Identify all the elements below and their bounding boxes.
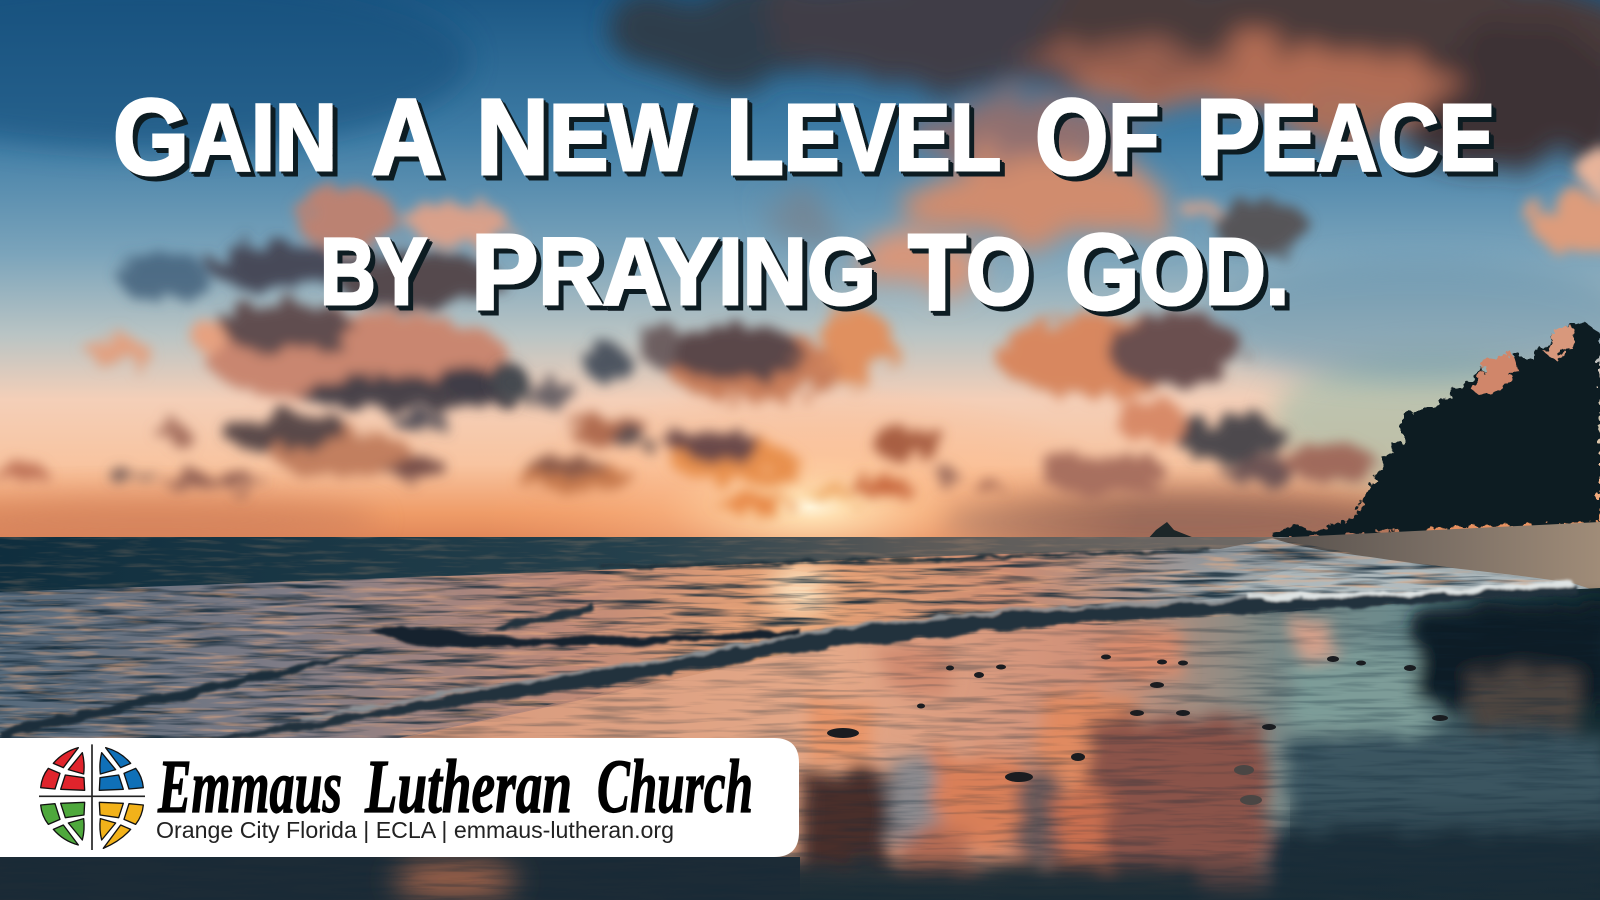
title line 2: OD. — [1139, 219, 1289, 325]
sand — [1272, 522, 1600, 592]
title line 1: EACE — [1260, 85, 1495, 191]
title line 1: L — [726, 76, 792, 197]
clouds left — [0, 146, 1600, 489]
title line 1: F — [1108, 85, 1159, 191]
title line 2: G — [1065, 211, 1149, 332]
church name: Church — [597, 745, 753, 829]
pebbles on wet sand — [827, 654, 1448, 805]
yellow quadrant — [99, 802, 143, 848]
green quadrant — [41, 802, 85, 845]
church name: Emmaus — [157, 745, 342, 829]
title line 2: RAYING — [538, 219, 876, 325]
title line 1: EW — [549, 85, 692, 191]
title line 2: O — [966, 219, 1031, 325]
title line 2 — [320, 211, 1289, 332]
title line 1: N — [476, 76, 554, 197]
tree-lined headland — [1146, 323, 1600, 541]
church details line: Orange City Florida | ECLA | emmaus-lutheran.org — [156, 817, 674, 843]
church name — [157, 745, 753, 829]
blue quadrant — [99, 748, 143, 790]
sea — [0, 522, 1600, 900]
title line 2: T — [908, 211, 974, 332]
waves and foam — [0, 550, 1578, 745]
icon: church globe cross logo — [39, 744, 145, 850]
foam spray — [1170, 566, 1572, 606]
clouds centre — [494, 307, 1378, 512]
church name: Lutheran — [364, 745, 572, 829]
red quadrant — [41, 748, 85, 790]
church banner — [0, 738, 799, 857]
title line 1: G — [113, 76, 197, 197]
wet sand foreground with reflections — [0, 588, 1600, 900]
title line 1: AIN — [189, 85, 337, 191]
title line 1: O — [1035, 76, 1119, 197]
title line 1: P — [1196, 76, 1268, 197]
clouds upper right — [612, 0, 1600, 296]
dark foot of frame — [0, 857, 800, 900]
title line 1 — [113, 76, 1495, 197]
rock island — [1146, 522, 1202, 541]
title line 1: EVEL — [784, 85, 1001, 191]
title — [113, 76, 1495, 332]
title line 1: A — [371, 76, 442, 197]
title line 2: P — [471, 211, 543, 332]
sky — [0, 0, 1600, 632]
water texture streaks — [0, 530, 1600, 900]
title line 2: BY — [320, 219, 427, 325]
